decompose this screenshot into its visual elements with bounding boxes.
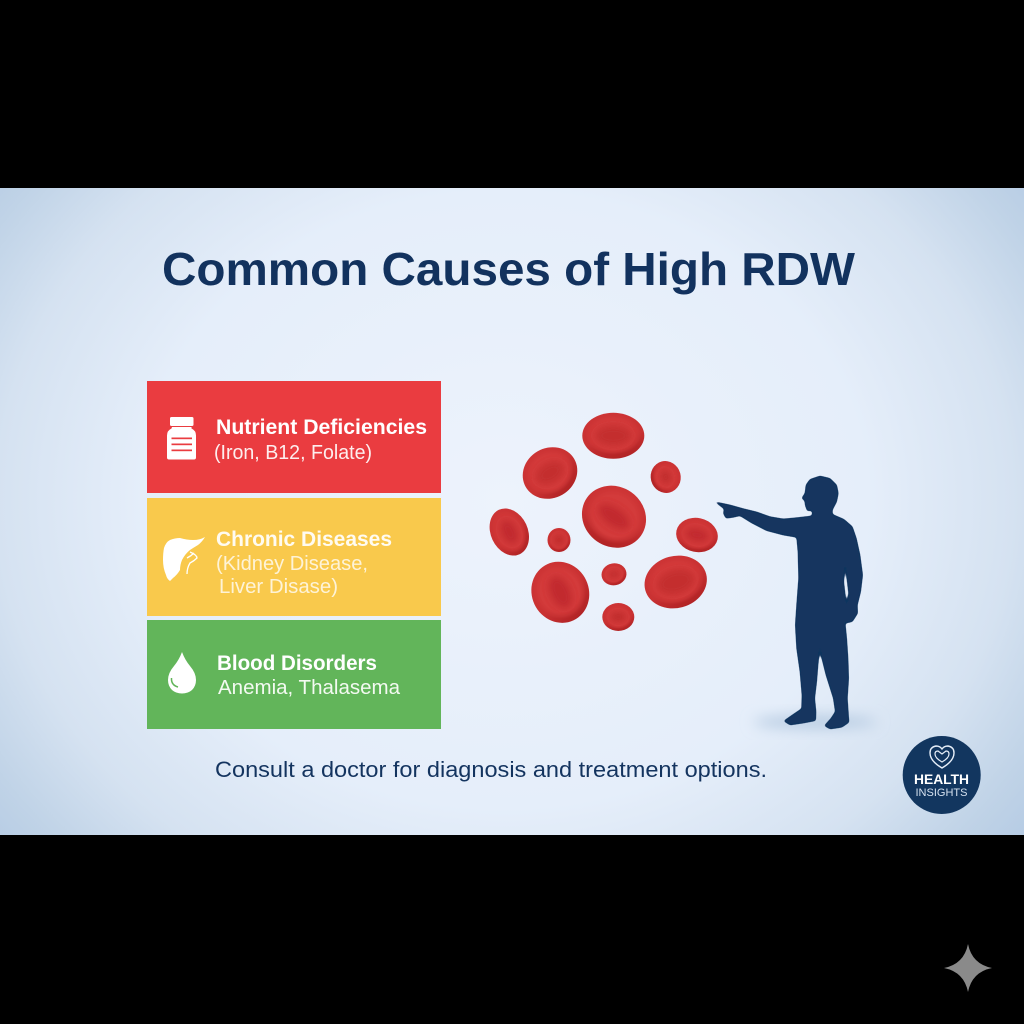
red blood cell 11 [602, 603, 634, 631]
illustration: red blood cells [482, 413, 721, 632]
ground shadow [753, 716, 877, 728]
illustration: pointing person silhouette [715, 476, 863, 729]
heading: nutrient deficiencies: Nutrient Deficiencies [216, 416, 427, 439]
logo text: HEALTH [914, 772, 969, 787]
heading: chronic diseases: Chronic Diseases [216, 528, 392, 551]
icon: blood drop [168, 652, 196, 694]
icon: liver [163, 537, 205, 581]
red blood cell 7 [673, 514, 721, 556]
text: nutrient examples: (Iron, B12, Folate) [214, 442, 372, 464]
panel: causes list [147, 381, 441, 729]
heading: blood disorders: Blood Disorders [217, 652, 377, 675]
panel: chronic diseases [147, 498, 441, 616]
icon: sparkle watermark [944, 944, 992, 992]
red blood cell 3 [647, 458, 684, 496]
footer note: Consult a doctor for diagnosis and treatment options. [215, 757, 767, 782]
red blood cell 1 [582, 413, 644, 459]
text: blood disorder examples: Anemia, Thalasema [218, 677, 401, 699]
panel: nutrient deficiencies [147, 381, 441, 493]
icon: supplement bottle [167, 417, 196, 460]
red blood cell 2 [513, 437, 587, 509]
red blood cell 10 [639, 549, 713, 615]
red blood cell 5 [482, 502, 536, 562]
icon: heart [930, 746, 954, 768]
logo text: INSIGHTS [916, 787, 968, 799]
red blood cell 8 [521, 552, 599, 632]
panel: blood disorders [147, 620, 441, 729]
red blood cell 9 [600, 561, 628, 587]
text: chronic disease examples [216, 553, 368, 598]
logo badge: health insights [903, 736, 981, 814]
text: chronic disease examples: (Kidney Disease, [216, 553, 368, 575]
red blood cell 4 [570, 473, 658, 560]
title: Common Causes of High RDW [162, 243, 856, 295]
logo text [914, 772, 969, 799]
red blood cell 6 [548, 528, 570, 552]
background panel [0, 188, 1024, 835]
text: chronic disease examples: Liver Disase) [219, 576, 338, 598]
